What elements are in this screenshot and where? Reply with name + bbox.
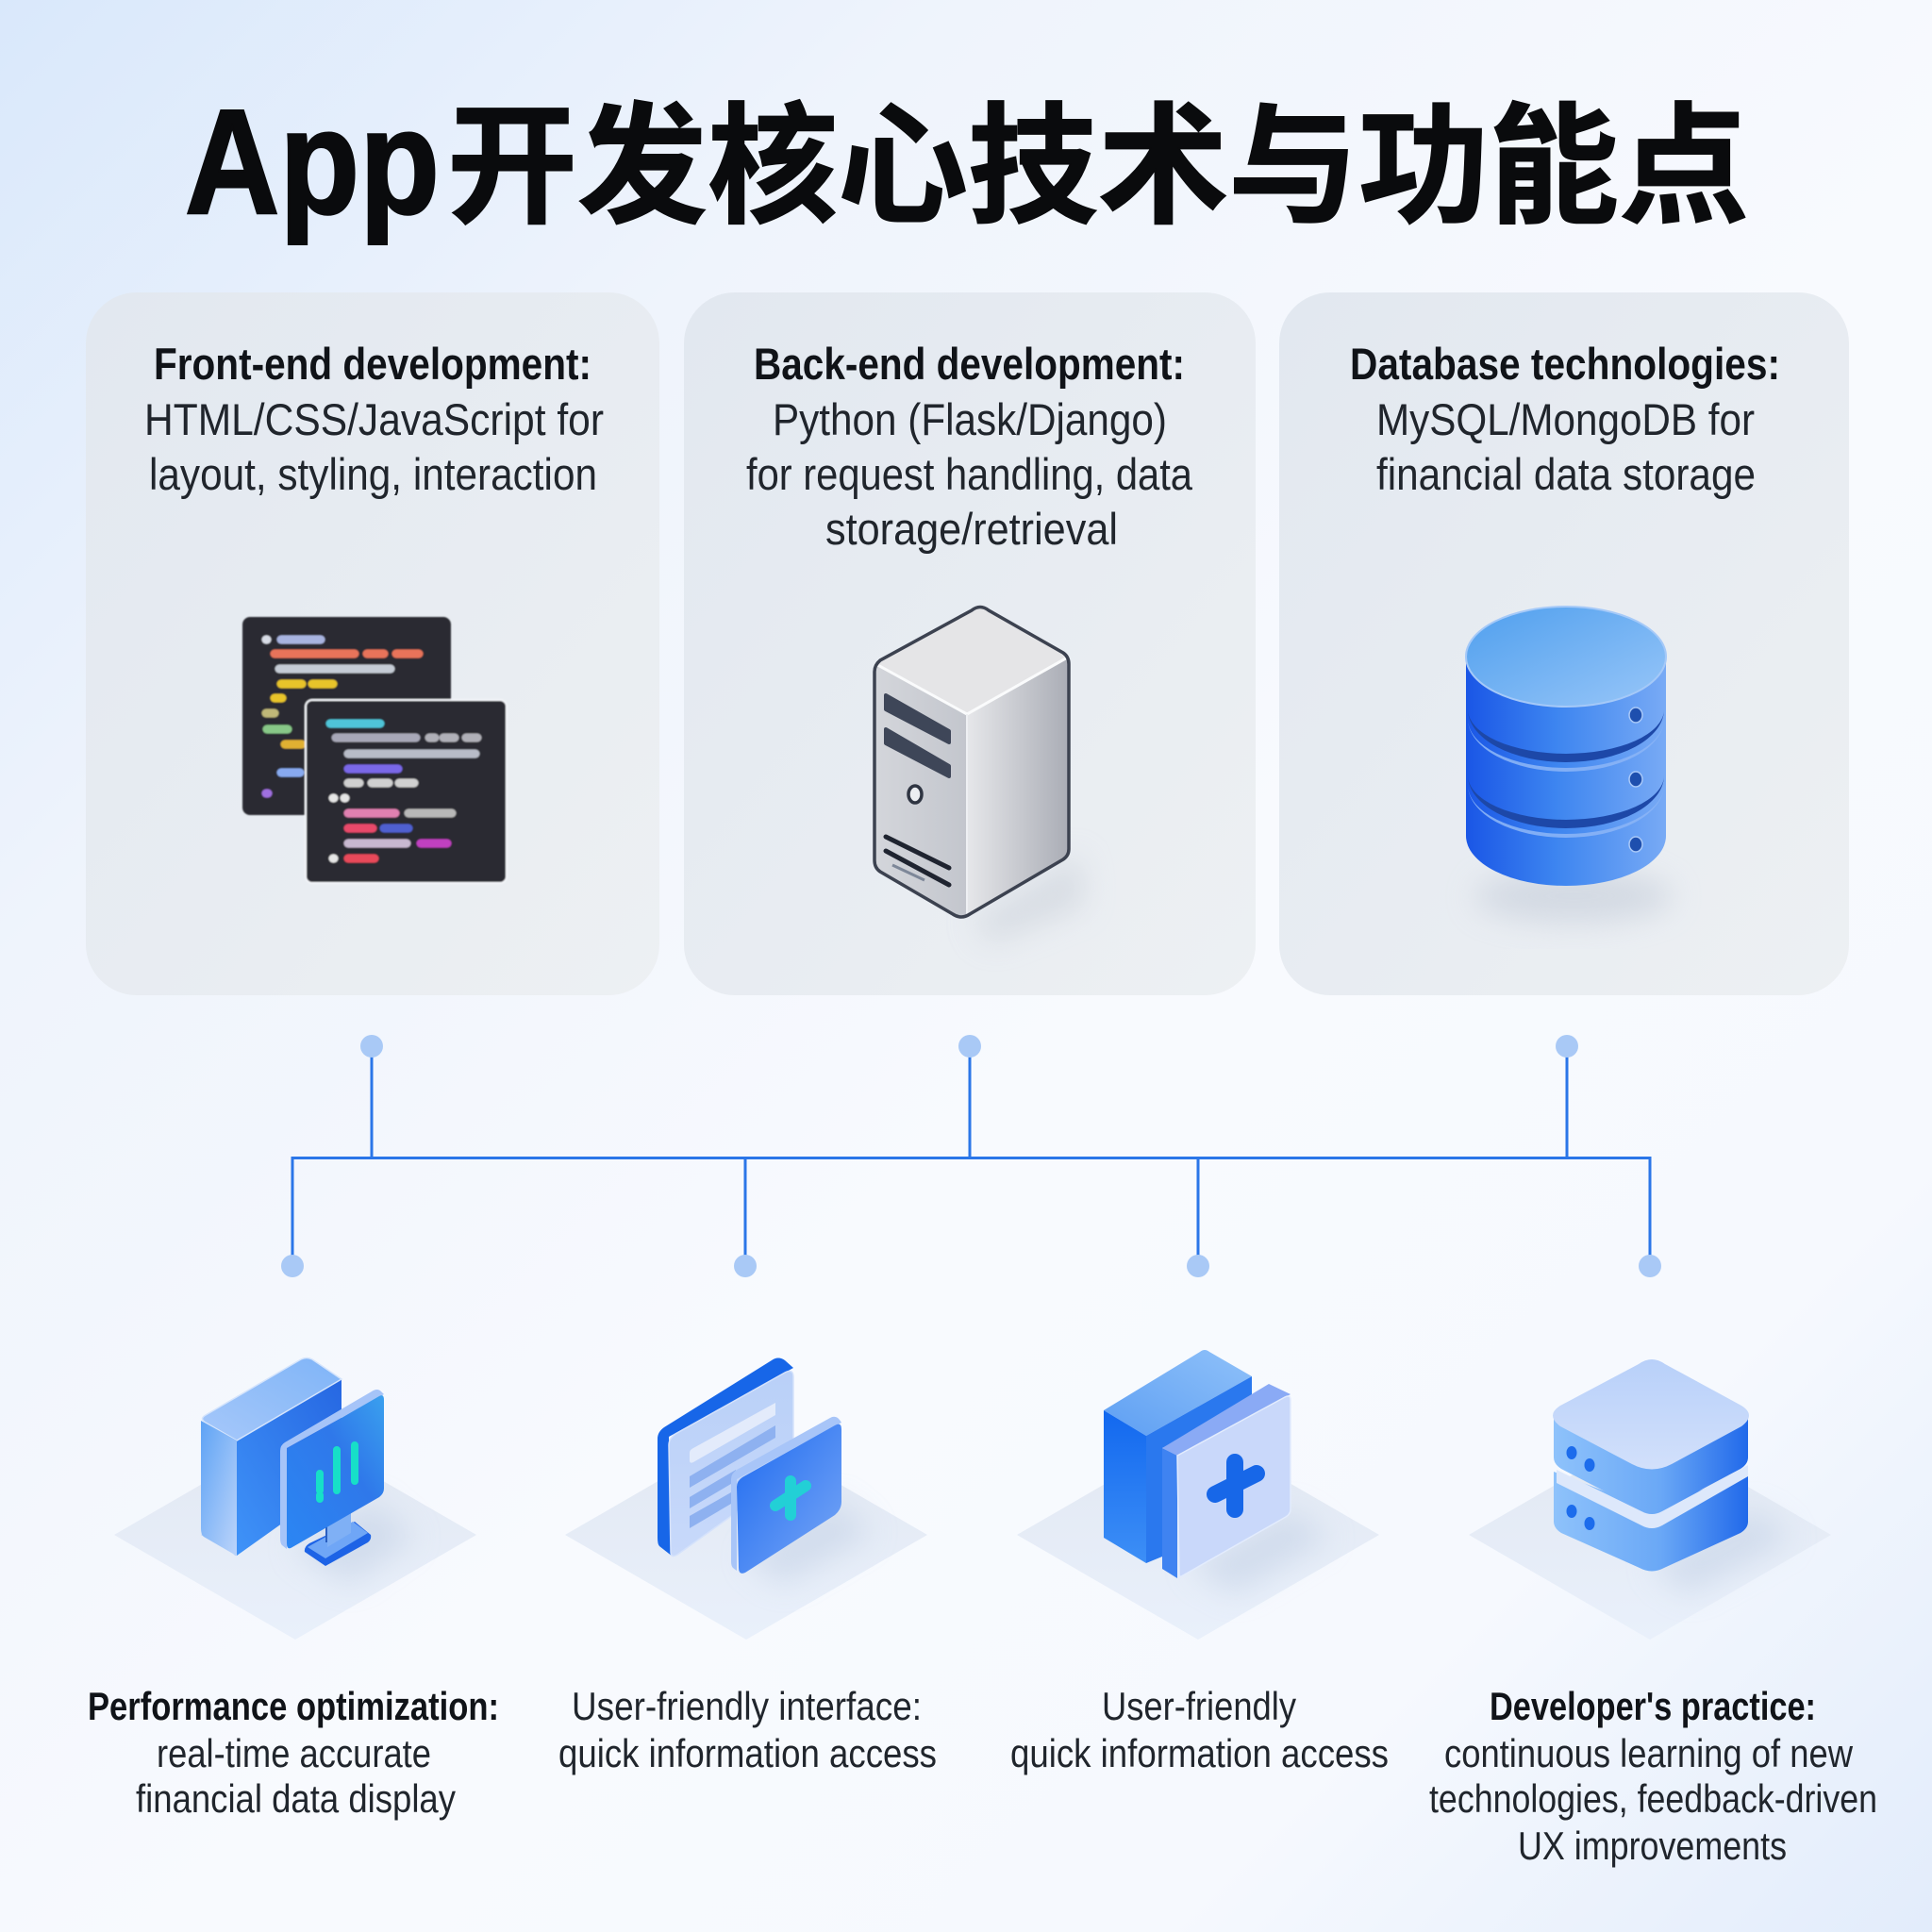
text: user-friendly access: User-friendly	[1102, 1684, 1296, 1728]
text: back-end description: Python (Flask/Django)	[773, 394, 1167, 444]
text: user-friendly access	[1010, 1684, 1389, 1775]
title: 开发核心技术与功能点	[447, 61, 1749, 251]
icon: blocks with plus on platform	[1017, 1350, 1379, 1640]
text: performance optimization: real-time accurate	[157, 1731, 431, 1775]
text: database description	[1350, 339, 1780, 499]
text: database description: Database technologies:	[1350, 339, 1780, 389]
item: user-friendly access	[1010, 1350, 1389, 1775]
text: front-end description	[144, 339, 604, 499]
text: performance optimization: financial data display	[136, 1776, 456, 1821]
text: user-friendly interface: quick information access	[558, 1731, 937, 1775]
icon: code windows	[242, 617, 507, 883]
icon: server tower	[868, 599, 1085, 943]
text: database description: MySQL/MongoDB for	[1376, 394, 1755, 444]
icon: stacked server on platform	[1469, 1359, 1831, 1640]
text: user-friendly interface	[558, 1684, 937, 1775]
panel: database technologies	[1279, 292, 1849, 995]
text: back-end description: for request handling, data	[746, 449, 1193, 499]
text: front-end description: layout, styling, interaction	[149, 449, 597, 499]
panel: front-end development	[86, 292, 659, 995]
panel: back-end development	[684, 292, 1256, 995]
text: back-end description: storage/retrieval	[825, 504, 1118, 554]
item: user-friendly interface	[558, 1358, 937, 1775]
text: back-end description: Back-end development:	[754, 339, 1185, 389]
item: developer's practice	[1429, 1359, 1877, 1868]
item: performance optimization	[88, 1358, 499, 1821]
text: user-friendly access: quick information access	[1010, 1731, 1389, 1775]
text: database description: financial data storage	[1376, 449, 1756, 499]
icon: monitor on platform	[114, 1358, 476, 1640]
icon: document card on platform	[565, 1358, 927, 1640]
text: user-friendly interface: User-friendly interface:	[572, 1684, 922, 1728]
text: developer's practice: continuous learning of new	[1444, 1731, 1854, 1775]
text: front-end description: Front-end development:	[154, 339, 591, 389]
text: back-end description	[746, 339, 1193, 554]
title: App	[185, 79, 440, 245]
text: developer's practice: UX improvements	[1518, 1824, 1787, 1868]
connector diagram	[281, 1035, 1661, 1277]
text: front-end description: HTML/CSS/JavaScript for	[144, 394, 604, 444]
text: developer's practice: Developer's practice:	[1490, 1684, 1816, 1728]
text: developer's practice	[1429, 1684, 1877, 1868]
icon: database cylinder	[1466, 607, 1673, 923]
text: performance optimization: Performance optimization:	[88, 1684, 499, 1728]
text: performance optimization	[88, 1684, 499, 1821]
